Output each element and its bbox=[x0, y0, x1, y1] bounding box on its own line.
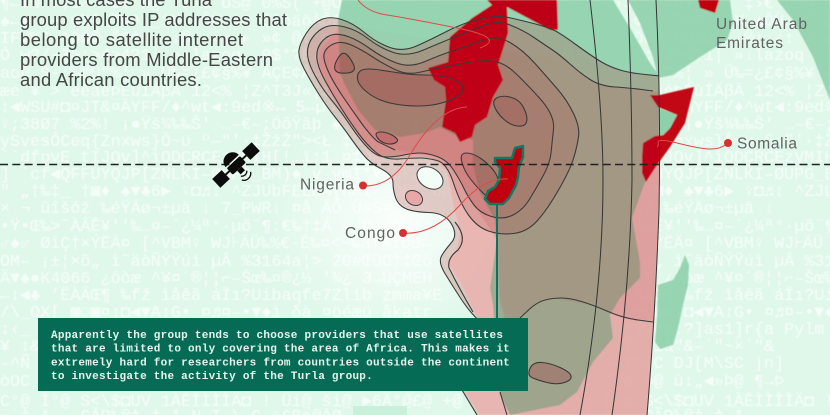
background: code characters: × ¬ ûîšóž ‰éŸÄø¬±µä ↓ 7_PWR↓ ¤å ÄÔ Û#Š≈ ↕ bbox=[0, 199, 412, 219]
background: code characters: ¥ ↕&– Ÿ"_îâ"&–`"~×`"& 7èæ^ ÔÔ‡ ↕&– Ÿ"_îâ bbox=[0, 337, 402, 357]
land: Arabian peninsula bbox=[628, 0, 733, 78]
background: code characters: •Ÿ•Œ‰>˜ÀÂÊ¥''‰…¤–´¿¼ª°·µõ¨¶:€‰†‡Á » Ü. ^<+: bbox=[0, 217, 432, 237]
contour: southern ring bbox=[561, 316, 652, 414]
background: code characters: C°@ Ì°@ S<\$◘UV 1ÀÊÌÌÌÌÄ◘ ! Üi@ ši@ ►6Ä°@£@ +@ bbox=[0, 392, 462, 412]
background: code characters: Ä▼♠●K4066 ¿ôòæ ^¥¤´®¦¦⌐–Šœ‰¤®¿½ '¾¿ Э→ÜÇMEH bbox=[0, 269, 432, 289]
intro text block: providers from Middle-Eastern bbox=[20, 49, 273, 70]
land: Iran coast bbox=[777, 0, 830, 100]
callout: Somalia: Somalia bbox=[737, 136, 797, 152]
coverage contours fills bbox=[299, 17, 660, 415]
contour: Congo lobe bbox=[462, 154, 497, 194]
background: code characters: ♠←♠ ‹÷ ¢¾[ ™Þ^ _‡¥ ▲ÔÙ ¢C ôâòäöÀÕØ ?‡∞ ‡ÝÖ ¥ bbox=[0, 12, 442, 32]
callout: Somalia bbox=[657, 136, 797, 152]
contour: outer coverage bbox=[299, 17, 660, 415]
land and coverage fills bbox=[299, 0, 830, 415]
background: code characters: ↕‹_ Jujzvóh:?]as1]r{a Pylm{ ^vÄ ‰ØÂ◄ Jujzvóh: bbox=[0, 320, 452, 340]
country: Congo bbox=[485, 146, 523, 204]
land: north and central Africa bbox=[338, 0, 661, 415]
country: Sudan and Chad area bbox=[428, 0, 558, 142]
land: pink coverage of Africa bbox=[318, 25, 660, 415]
background: code characters: Ô w?/-3>;>4>4?1| »↓lazoq .9$*?Ê/o?k20,u¶ ÷T?÷ bbox=[0, 46, 452, 66]
background: code characters: –^Ñ ¬–žSSC DJ[M\SC |n] ^@#A v ¬–žSSC DJ[M\SC bbox=[0, 354, 442, 374]
country: United Arab Emirates bbox=[698, 0, 719, 13]
contour: southern lobe bbox=[529, 362, 571, 384]
contour lines bbox=[299, 17, 660, 415]
background: code characters: ←↕◄♣ ’ËÀÄŒ¶ ‰fž ìåêã áÏı?Uibaqfe7Zlib zmma¥E bbox=[0, 286, 442, 306]
country: Somalia bbox=[642, 87, 694, 182]
background: code characters: × ¬ ûîšóž ‰éŸÄø¬±µä ↓ bbox=[563, 199, 774, 219]
label: United Arab Emirates: United Arab bbox=[716, 16, 807, 33]
intro text block: belong to satellite internet bbox=[20, 29, 243, 50]
background: code characters: /\_OX[ ◙☺◙¤↕◘◄▼A↕G• ¤♬¤–•▼♦ì δà ¤öéæü åkatr bbox=[0, 304, 432, 323]
callout: Congo: Congo bbox=[345, 225, 395, 242]
meridian lines bbox=[580, 0, 660, 415]
background: code characters: " „†‰‡_ †◙♦ ♠▼♣6► ♀◘♬↕ ^ZJUbFELEM{hMI –Ö@‡ U@ bbox=[0, 182, 452, 202]
background: code characters: ↕◄WSU#◘¤JT&¤ÄYFF/♦^wt◄:9ed※↔ 5←µ→ U¢6 ←‡K1†¡ bbox=[0, 98, 446, 118]
background: code characters: IFV%S ^ÖÖ@ ÕQ‡UL ↓®↑ ‹↕ ▸ »¢ @↕ vs)@ Ï±mgx ÑV bbox=[0, 29, 452, 49]
background: code characters: Ô w?/-3>;>4>4?1| »↓lazoq bbox=[563, 46, 804, 66]
icon: satellite bbox=[207, 136, 268, 197]
intro text block: and African countries. bbox=[20, 69, 202, 90]
connector: Congo to text box bbox=[496, 205, 498, 320]
background: code characters: ¥ ↕&– Ÿ"_îâ"&–`"~×`"& bbox=[563, 337, 774, 357]
small island of coverage bbox=[403, 187, 425, 209]
contour: fourth ring bbox=[324, 42, 554, 218]
background: code characters: OM– ¡±¦×õ„ ì˜äòÑÝŸúì µÂ %31 bbox=[563, 252, 830, 272]
background: code characters: ♂♠♂ ØìÇ†×ÝËÄ¤ [^VBM♀ WJ⊦ÄÜ‰%€-Ê‰¤<~‰a!%ÎD0← bbox=[0, 234, 431, 254]
background: code characters: ♀;38Ø7 %2%! ¡●Ÿš¾‰‰Š' …–€–;ÓõŸâþ ♠↕‹{‡ ¥…¢ ÐÒ«( bbox=[0, 115, 472, 135]
contour: third ring bbox=[317, 34, 579, 234]
contour: second ring bbox=[307, 23, 660, 340]
background: code characters: ``dfpvE tIJQv]^iODCRCEzVMIH[!…ï:1 ¤‡ÒÆqnbMg bbox=[0, 148, 432, 168]
background: code characters: Ä▼♠●K4066 ¿ôòæ ^¥¤´®¦¦⌐–Šœ‰ bbox=[563, 269, 830, 289]
callout box: explanation: Apparently the group tends to choose providers that use satellites bbox=[51, 330, 503, 342]
background: code characters: –^Ñ ¬–žSSC DJ[M\SC |n] bbox=[563, 354, 784, 374]
background: code characters: òOC ⁴™ò Þ@ ù↕„◄»Þ@ ¶→Þ )<‡@ ⁴™ò Þ@ ù↕„ bbox=[0, 373, 382, 392]
equator dashed line bbox=[0, 164, 830, 166]
contour: small west lobe bbox=[335, 53, 354, 73]
background: code characters: aoú S-;‰®Ü"%¦ » Ü‰=¿£¢§%¥ ÄÇE¢Å¤V¥ÛÂ¿ujhryao bbox=[0, 64, 442, 84]
contour: right lobe bbox=[494, 96, 527, 126]
callout box: explanation: extremely hard for researchers from countries outside the continent bbox=[51, 358, 510, 370]
contour: small lobe bbox=[376, 132, 397, 144]
callout: Congo bbox=[345, 179, 508, 242]
callout box: explanation: to investigate the activity of the Turla group. bbox=[51, 371, 373, 383]
intro text block bbox=[20, 0, 287, 90]
background: code characters: òOC ⁴™ò Þ@ ù↕„◄»Þ@ ¶→Þ bbox=[563, 373, 784, 392]
callout: Nigeria: Nigeria bbox=[300, 176, 354, 194]
leader line: upper country bbox=[358, 0, 489, 48]
callout: Nigeria bbox=[300, 107, 467, 194]
label: United Arab Emirates bbox=[716, 16, 807, 52]
intro text block: group exploits IP addresses that bbox=[20, 9, 287, 30]
background: code characters: ] `cf◄QFFUYQJP[ZNLKI–ØUPG_BM)♦ v ymI*▼ drq ¤‡{D bbox=[0, 166, 472, 185]
background: code characters: ♂♠♂ ØìÇ†×ÝËÄ¤ [^VBM♀ WJ⊦ÄÜ bbox=[563, 234, 823, 254]
land: Madagascar bbox=[655, 255, 689, 349]
background: code characters: ySvesÔCeq{Znxws}Ô~υ º—"'·‡ŽžŽ"><Ł ‡CellaiayS bbox=[0, 132, 442, 152]
panel: map of Africa with coverage bbox=[299, 0, 830, 415]
contour: long lobe bbox=[358, 70, 447, 106]
label: United Arab Emirates: Emirates bbox=[716, 35, 783, 52]
land: Ethiopia notch bbox=[659, 108, 677, 135]
background: code characters: æe ¥ > eêàéÞÉùÍÄβÄ 12<% ¦Z^T3J«¦‡»«ø%¤ mgax bbox=[0, 82, 432, 102]
highlighted code block bbox=[353, 406, 407, 415]
background: code characters: ↕‹_ Jujzvóh:?]as1]r{a Pylm bbox=[563, 321, 824, 340]
hole in coverage bbox=[413, 162, 447, 194]
background: code characters: ←↕◄♣ ’ËÀÄŒ¶ ‰fž ìåêã áÏı?Ui bbox=[563, 286, 830, 306]
callout box: explanation bbox=[38, 318, 528, 391]
callout box: explanation: that are limited to only covering the area of Africa. This makes it bbox=[51, 344, 510, 356]
background: code characters: OM– ¡±¦×õ„ ì˜äòÑÝŸúì µÂ %3164a¦> 20#ŒûØ†‡Œõ bbox=[0, 252, 432, 272]
